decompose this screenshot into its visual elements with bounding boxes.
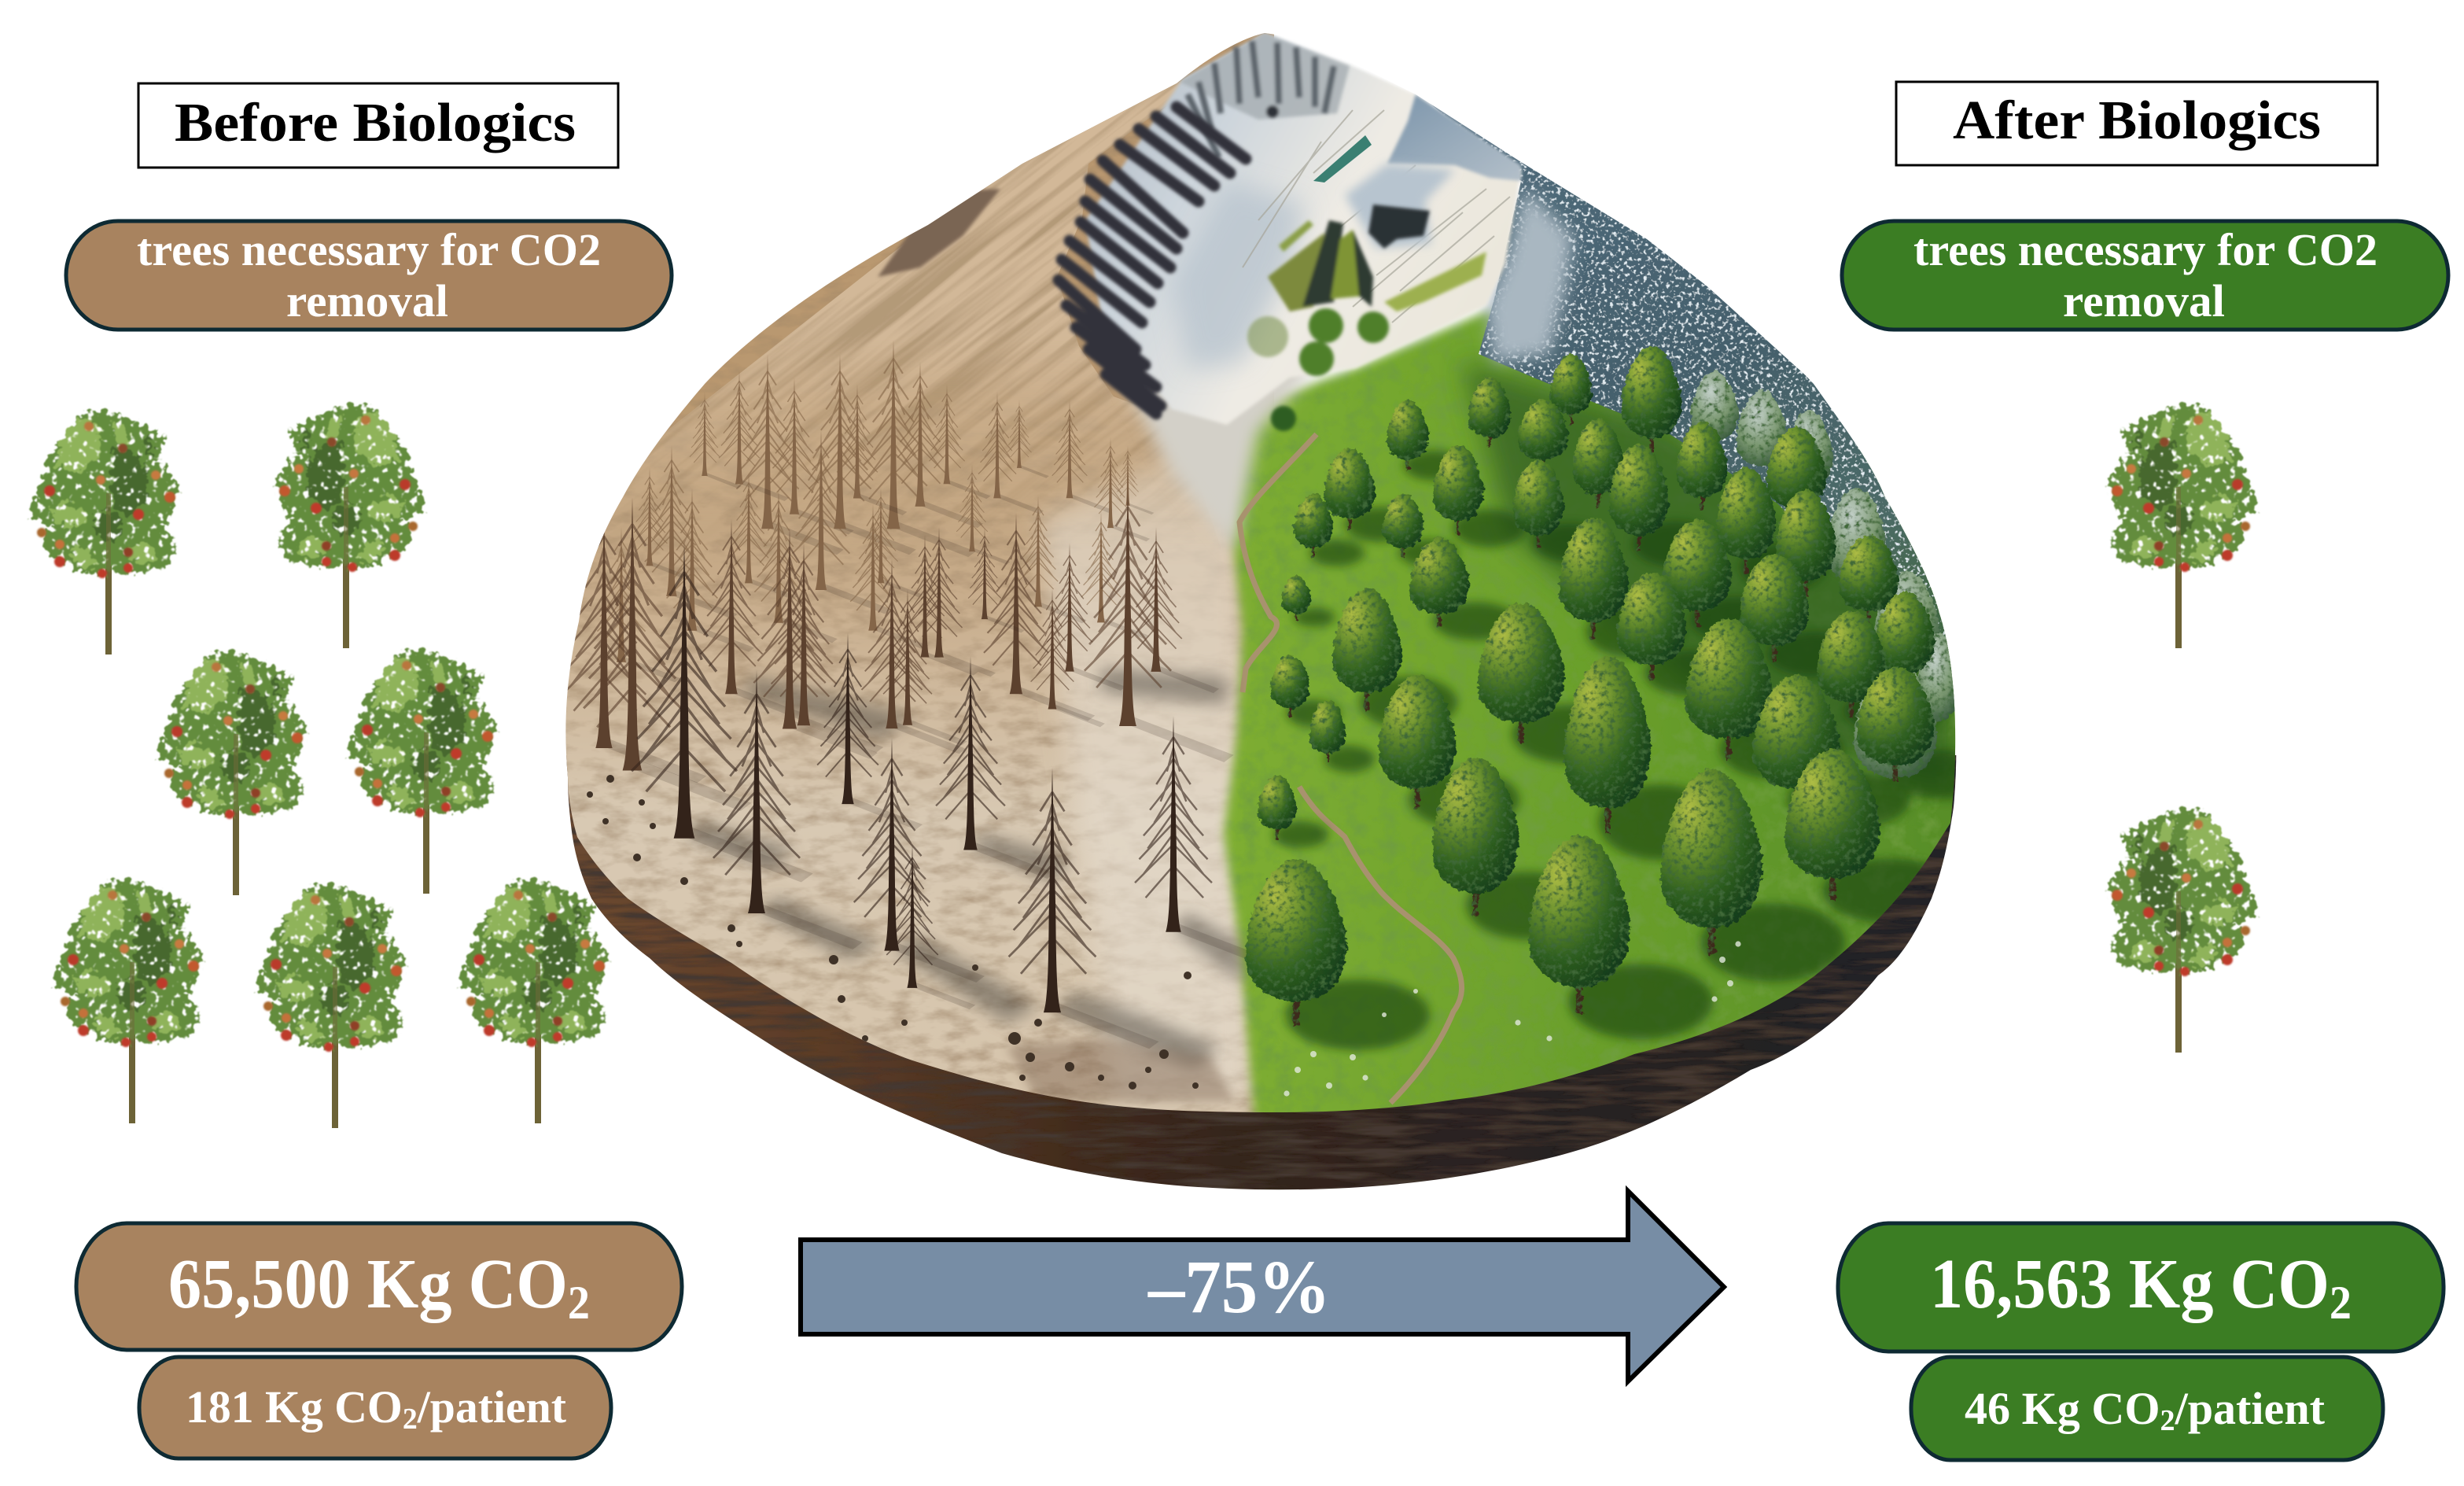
heading: after biologics: After Biologics <box>1953 90 2321 151</box>
green trees, foreground <box>1246 749 1880 1026</box>
brown streaked mountainside <box>628 80 1186 522</box>
tree 6 <box>256 884 405 1128</box>
per patient after: 2 <box>2160 1404 2175 1437</box>
total emissions after: 2 <box>2330 1277 2352 1329</box>
tree 7 <box>459 879 608 1123</box>
soft tree shadows on sand <box>684 669 1243 1070</box>
frosted blue-grey right slope <box>1431 104 1954 703</box>
dead trees, foreground <box>632 543 1268 1049</box>
island surface <box>565 33 1955 1112</box>
reduction arrow <box>801 1191 1724 1381</box>
total emissions before <box>76 1223 682 1350</box>
snow shading <box>1172 181 1306 370</box>
heading: before biologics <box>138 83 618 168</box>
top rock striations <box>1180 33 1350 157</box>
tree 4 <box>348 650 496 894</box>
tree 1 <box>30 411 179 655</box>
per patient after: 46 Kg CO <box>1965 1383 2160 1434</box>
slope shrubs <box>1247 308 1389 431</box>
per patient before: 2 <box>403 1403 418 1436</box>
secondary brown ridge <box>878 189 1000 277</box>
island soil base <box>551 755 1982 1211</box>
per patient before: 181 Kg CO <box>186 1381 403 1433</box>
shaded understory behind back trees <box>1463 362 1950 787</box>
inner rock and grass patches <box>1268 205 1486 312</box>
grey scree below snow <box>1120 374 1312 554</box>
tree 9 <box>2109 809 2257 1053</box>
snow streaks <box>1243 110 1510 323</box>
tree 2 <box>276 404 425 648</box>
barren sand ground <box>551 16 1274 1133</box>
pebbles and debris on sand <box>587 775 1235 1101</box>
smooth blue scree face <box>1486 189 1573 362</box>
total emissions after: 16,563 Kg CO <box>1930 1245 2357 1323</box>
heading: after biologics <box>1896 82 2377 165</box>
dead trees, mid rows <box>562 483 1234 811</box>
tree group: after biologics <box>2109 404 2257 1053</box>
label pill: trees before: removal <box>286 275 448 326</box>
winding path <box>1239 434 1462 1103</box>
heading: before biologics: Before Biologics <box>175 93 576 153</box>
green trees, frosted back rows <box>1691 371 1959 778</box>
snowy peak <box>1085 33 1521 425</box>
wildflowers <box>1284 941 1741 1097</box>
label pill: trees after: trees necessary for CO2 <box>1913 224 2377 275</box>
label pill: trees before: trees necessary for CO2 <box>137 224 601 275</box>
per patient after: /patient <box>2175 1383 2326 1434</box>
total emissions before: 2 <box>568 1277 590 1329</box>
dead trees, far rows <box>597 340 1154 682</box>
green trees, back rows <box>1281 346 1899 624</box>
central mountain island illustration <box>99 0 1998 1211</box>
reduction arrow: –75% <box>1147 1244 1331 1329</box>
tree 8 <box>2109 404 2257 648</box>
tree 3 <box>157 651 306 895</box>
total emissions before: 65,500 Kg CO <box>168 1245 595 1323</box>
green trees, middle rows <box>1270 518 1935 834</box>
pale sand near the divide <box>1038 425 1250 1101</box>
label pill: trees after <box>1842 221 2448 330</box>
dark rocky ridge striations <box>1059 107 1246 414</box>
total emissions after <box>1838 1223 2444 1351</box>
label pill: trees before <box>66 221 672 330</box>
label pill: trees after: removal <box>2063 275 2225 326</box>
teal strip on snow <box>1313 135 1372 183</box>
blue shaded snow face <box>1387 94 1521 181</box>
tree 5 <box>53 879 202 1123</box>
per patient after <box>1911 1357 2383 1460</box>
green meadow <box>1217 305 1955 1112</box>
per patient before: /patient <box>417 1381 567 1433</box>
per patient before <box>139 1357 611 1458</box>
tree group: before biologics <box>30 404 608 1128</box>
green tree ground shadows <box>1273 451 1998 1050</box>
